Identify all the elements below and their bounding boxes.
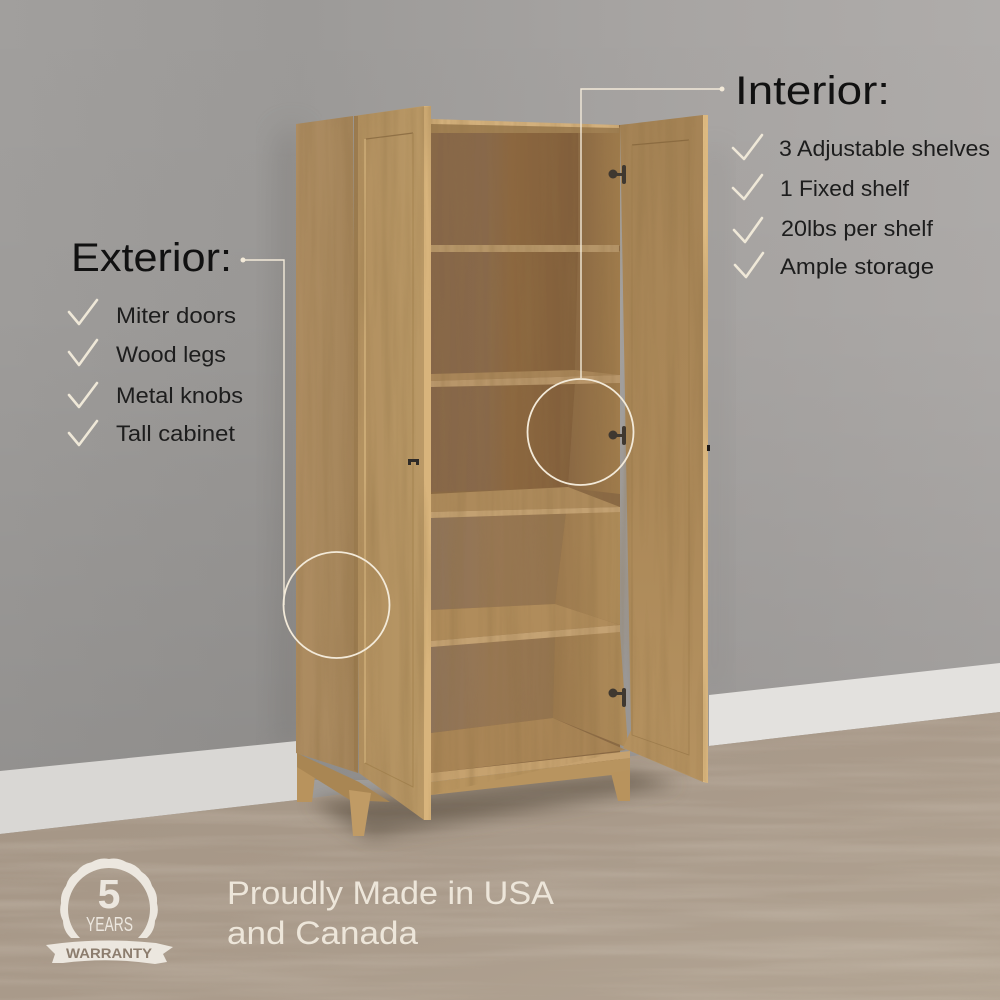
list: exterior features: Wood legs bbox=[116, 342, 226, 367]
tagline bbox=[227, 875, 555, 951]
hinge: bottom bbox=[608, 688, 626, 707]
floor bbox=[0, 700, 1000, 1000]
shelf 4 bbox=[431, 604, 620, 647]
knob: left door bbox=[408, 459, 419, 465]
shelf 3 bbox=[431, 487, 620, 518]
list: exterior features: Miter doors bbox=[116, 303, 236, 328]
right door bbox=[620, 115, 708, 783]
interior side wall bbox=[578, 127, 620, 246]
heading: Exterior: Exterior: bbox=[71, 236, 232, 280]
tagline: and Canada bbox=[227, 915, 418, 951]
legs and rail bbox=[297, 753, 630, 836]
list: exterior features bbox=[116, 303, 243, 446]
badge scalloped ring bbox=[60, 859, 158, 938]
list: interior features: 20lbs per shelf bbox=[781, 216, 934, 241]
top board bbox=[431, 123, 619, 133]
badge years label: YEARS bbox=[86, 914, 133, 936]
left door bbox=[354, 106, 431, 820]
list: interior features: 3 Adjustable shelves bbox=[779, 136, 990, 161]
baseboard bbox=[0, 663, 1000, 834]
list: interior features bbox=[779, 136, 990, 279]
callout: exterior leader line and circle bbox=[240, 258, 390, 658]
icons: exterior check marks bbox=[69, 300, 97, 445]
cabinet back and rear of interior bbox=[431, 123, 620, 780]
badge ribbon bbox=[46, 940, 173, 964]
list: exterior features: Metal knobs bbox=[116, 383, 243, 408]
icons: interior check marks bbox=[733, 135, 763, 277]
list: interior features: Ample storage bbox=[780, 254, 934, 279]
badge warranty label: WARRANTY bbox=[66, 945, 153, 961]
wood grain bbox=[316, 106, 708, 808]
hinge: top bbox=[608, 165, 626, 184]
shelf 2 bbox=[431, 370, 620, 387]
bottom board bbox=[431, 718, 630, 795]
callout: interior leader line and circle bbox=[528, 86, 724, 485]
list: exterior features: Tall cabinet bbox=[116, 421, 235, 446]
list: interior features: 1 Fixed shelf bbox=[780, 176, 910, 201]
side panel bbox=[296, 116, 358, 773]
hinge: middle bbox=[608, 426, 626, 445]
wall background bbox=[0, 0, 1000, 780]
shelf 1 bbox=[431, 245, 619, 252]
badge number: 5 bbox=[98, 871, 120, 917]
tagline: Proudly Made in USA bbox=[227, 875, 555, 911]
warranty badge bbox=[46, 859, 173, 964]
heading: Interior: Interior: bbox=[735, 69, 890, 113]
cabinet bbox=[290, 100, 715, 836]
knob: right door bbox=[707, 445, 710, 451]
